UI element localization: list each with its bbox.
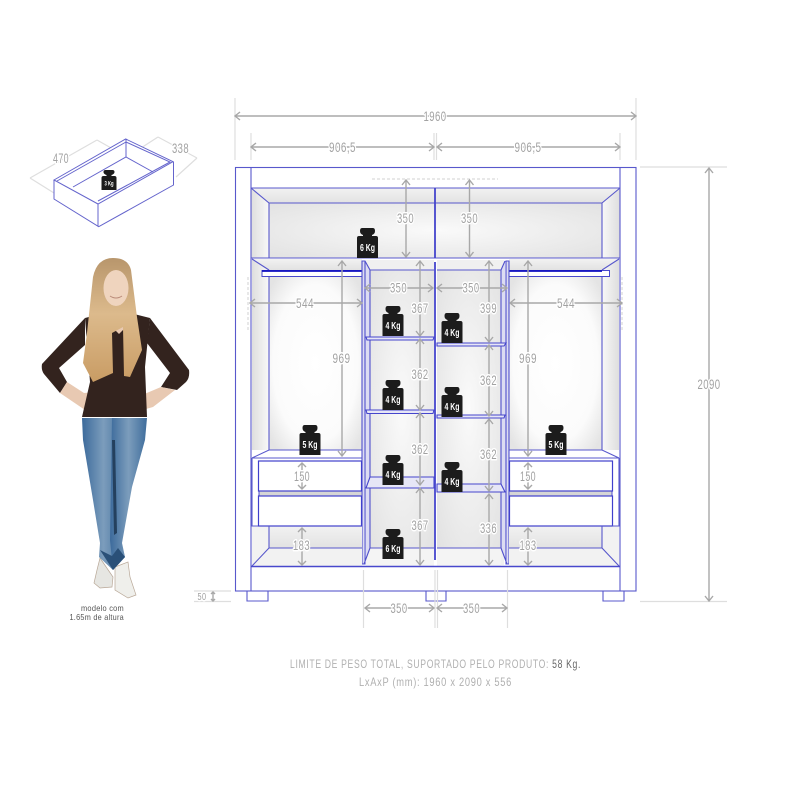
figure: forearms and hands <box>60 382 175 413</box>
dimension: 544 right: 544 <box>557 296 575 311</box>
wardrobe floor and feet <box>247 566 624 601</box>
dimension: 367 left top <box>412 261 428 336</box>
footer dimensions text: LxAxP (mm): 1960 x 2090 x 556 <box>359 675 512 689</box>
drawer illustration <box>30 137 197 227</box>
weight: 4 Kg right column 2 <box>442 387 462 417</box>
drawer weight 3 Kg: 3 Kg <box>104 182 114 188</box>
dashed guide lines <box>248 179 622 332</box>
weight: 6 Kg bottom <box>382 529 404 559</box>
model figure <box>42 258 189 598</box>
dimension: 336 right bottom: 336 <box>480 521 497 536</box>
figure caption <box>70 603 124 622</box>
left hanging rail <box>262 270 362 276</box>
left drawers <box>252 458 362 566</box>
dimension: 350 bottom right <box>437 601 507 616</box>
wardrobe outer frame <box>236 168 636 591</box>
dimension: 350 top left <box>397 180 414 257</box>
dimension: 150 right: 150 <box>520 469 536 484</box>
figure caption: modelo com <box>81 603 124 613</box>
dimension: 367 left top: 367 <box>412 301 428 316</box>
dimension: 544 right <box>510 296 622 311</box>
top compartment <box>251 168 620 591</box>
dimension: 362 left third <box>412 413 428 485</box>
weight: 4 Kg left column 2: 4 Kg <box>386 395 400 406</box>
dimension: 906,5 right: 906,5 <box>514 140 542 155</box>
dimension: 362 right third <box>480 419 497 491</box>
dimension: 50 foot height: 50 <box>198 592 206 603</box>
dimension: 350 center left: 350 <box>390 280 407 296</box>
weight: 4 Kg left column 3 <box>382 455 404 485</box>
weight: 4 Kg right column 2: 4 Kg <box>444 402 460 413</box>
weight: 5 Kg left <box>300 425 320 455</box>
figure: hair <box>83 258 142 382</box>
dimension: 183 right: 183 <box>520 538 536 553</box>
dimension: 544 left: 544 <box>296 296 314 311</box>
figure: torso <box>82 312 150 417</box>
dimension: 362 left second: 362 <box>412 367 428 382</box>
weight: 5 Kg left: 5 Kg <box>302 440 318 451</box>
dimension: 350 top right <box>461 180 478 257</box>
dimension: 367 left bottom <box>412 488 428 565</box>
dimension: 350 bottom right: 350 <box>463 601 480 616</box>
weight: 6 Kg top shelf: 6 Kg <box>360 243 375 254</box>
figure: face <box>104 270 128 306</box>
dimension: 350 center right <box>437 280 507 296</box>
dimension: 362 right second <box>480 345 497 416</box>
dimension: 362 left second <box>412 339 428 410</box>
dimension: 183 left: 183 <box>293 538 310 553</box>
center right column with shelves <box>437 260 509 566</box>
weight: 6 Kg top shelf <box>357 228 378 258</box>
dimension: 2090 height: 2090 <box>698 377 720 392</box>
dimension: 969 right <box>519 261 537 456</box>
dimension: 183 left <box>293 528 310 565</box>
dimension: 150 right <box>520 463 536 489</box>
weight: 5 Kg right: 5 Kg <box>548 440 564 451</box>
dimension: 150 left <box>294 463 310 489</box>
weight: 4 Kg left column 1: 4 Kg <box>386 321 400 332</box>
dimension: 1960: 1960 <box>424 109 446 124</box>
figure: chest <box>112 308 125 334</box>
weight: 4 Kg right column 1 <box>442 313 462 343</box>
figure: smile <box>110 296 122 298</box>
center left column with shelves <box>362 260 434 566</box>
weight: 5 Kg right <box>546 425 566 455</box>
wardrobe technical drawing <box>236 168 636 601</box>
dimension: 2090 height <box>698 168 720 601</box>
dimension: 969 right: 969 <box>519 351 537 366</box>
weight: 6 Kg bottom: 6 Kg <box>386 544 400 555</box>
right drawers <box>509 458 619 566</box>
dimension: 969 left: 969 <box>332 351 350 366</box>
weight: 4 Kg left column 1 <box>382 306 404 336</box>
weight: 4 Kg right column 3: 4 Kg <box>444 477 460 488</box>
figure: right shoe <box>115 562 136 598</box>
dimension: 399 right top: 399 <box>480 301 497 316</box>
dimension: 350 center right: 350 <box>462 280 480 296</box>
dimension: 350 center left <box>365 280 433 296</box>
weight: 4 Kg right column 1: 4 Kg <box>444 328 460 339</box>
right hanging compartment <box>509 259 619 458</box>
dimension: 350 bottom left <box>365 601 434 616</box>
figure caption: 1.65m de altura <box>70 612 124 622</box>
dimension: 906,5 left <box>251 140 434 155</box>
dimension: 362 right second: 362 <box>480 373 497 388</box>
footer weight limit text: LIMITE DE PESO TOTAL, SUPORTADO PELO PRODUTO: 58 Kg. <box>290 657 581 671</box>
dimension: 350 bottom left: 350 <box>390 601 408 616</box>
dimension: 362 left third: 362 <box>412 442 428 457</box>
dimension: 1960 <box>235 109 636 124</box>
dimension: 399 right top <box>480 261 497 342</box>
dimension: 150 left: 150 <box>294 469 310 484</box>
dimension: 336 right bottom <box>480 494 497 565</box>
right hanging rail <box>509 270 610 276</box>
dimension: 969 left <box>332 261 350 456</box>
weight: 4 Kg left column 2 <box>382 380 404 410</box>
figure: left shoe <box>94 558 113 588</box>
label: 470: 470 <box>53 151 69 166</box>
dimension: 350 top right: 350 <box>461 211 478 226</box>
figure: arms <box>42 318 189 393</box>
drawer dimension lines <box>30 137 197 193</box>
dimension: 350 top left: 350 <box>397 211 414 226</box>
dimension: 906,5 left: 906,5 <box>329 140 356 155</box>
dimension: 183 right <box>520 528 536 565</box>
dimension: 544 left <box>250 296 362 311</box>
dimension: 362 right third: 362 <box>480 447 497 462</box>
drawer body <box>54 139 174 227</box>
drawer weight 3 Kg <box>102 170 116 190</box>
dimension: 906,5 right <box>437 140 620 155</box>
label: 338: 338 <box>172 141 189 156</box>
left hanging compartment <box>252 259 362 458</box>
figure: jeans <box>82 418 147 570</box>
dimension guide lines <box>194 98 727 628</box>
weight: 4 Kg right column 3 <box>442 462 462 492</box>
weight: 4 Kg left column 3: 4 Kg <box>386 470 400 481</box>
dimension: 367 left bottom: 367 <box>412 518 428 533</box>
